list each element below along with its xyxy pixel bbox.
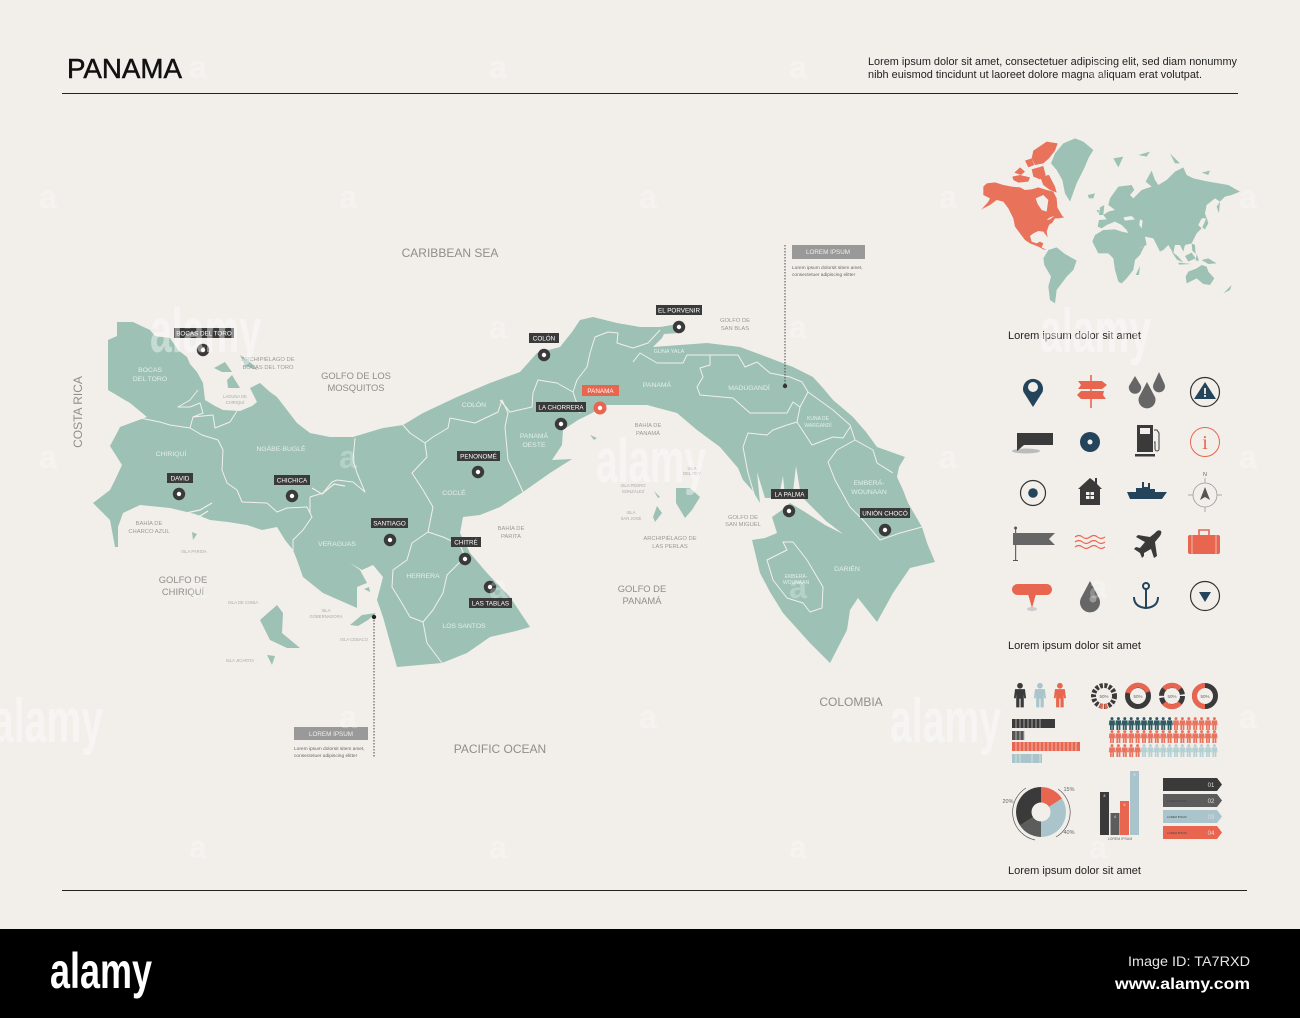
watermarks: a	[639, 179, 657, 215]
province labels: PANAMÁ	[643, 380, 672, 389]
watermarks: a	[339, 699, 357, 735]
water and neighbour labels: BAHÍA DE	[136, 520, 162, 527]
watermarks: a	[1089, 569, 1107, 605]
watermarks: a	[339, 179, 357, 215]
icon: down arrow	[1190, 582, 1220, 610]
callout: east: LOREM IPSUM	[806, 249, 850, 256]
province labels: CHIRIQUÍ	[156, 449, 186, 458]
intro text: Lorem ipsum dolor sit amet, consectetuer adipiscing elit, sed diam nonummy	[868, 56, 1238, 68]
water and neighbour labels: CARIBBEAN SEA	[402, 246, 498, 260]
water and neighbour labels: GOBERNADORA	[309, 614, 343, 619]
watermarks: a	[489, 829, 507, 865]
icon: compass: N	[1203, 472, 1207, 478]
mainland silhouette	[93, 317, 935, 667]
bar chart: 4	[1114, 815, 1116, 819]
arrow list: 03	[1208, 815, 1215, 821]
icon: house	[1078, 478, 1102, 505]
province labels: DARIÉN	[834, 564, 860, 573]
arrow list: LOREM IPSUM	[1167, 799, 1187, 803]
callout: west: consectetuer adipiscing elitter	[294, 753, 358, 759]
watermarks: a	[1239, 179, 1257, 215]
water and neighbour labels: ISLA DE COIBA	[228, 600, 258, 605]
province labels	[133, 349, 887, 630]
province labels: DEL TORO	[133, 376, 167, 383]
province labels: COCLÉ	[442, 488, 466, 497]
watermarks: a	[39, 439, 57, 475]
water and neighbour labels: ISLA	[321, 608, 331, 613]
donut charts: 50%	[1099, 694, 1109, 699]
water and neighbour labels: MOSQUITOS	[327, 382, 385, 393]
icon: drops	[1129, 372, 1165, 408]
watermarks: a	[39, 179, 57, 215]
province labels: EMBERÁ-	[854, 478, 884, 487]
water and neighbour labels: BAHÍA DE	[635, 422, 661, 429]
water and neighbour labels: SAN JOSÉ	[621, 516, 642, 521]
water and neighbour labels: SAN BLAS	[721, 326, 749, 332]
watermarks: a	[189, 829, 207, 865]
icon: anchor	[1134, 583, 1158, 608]
water and neighbour labels: LAS PERLAS	[652, 544, 688, 550]
watermarks: a	[789, 309, 807, 345]
icon: location pin	[1023, 379, 1043, 407]
footer bar: alamy	[50, 943, 152, 999]
icon: compass	[1188, 472, 1222, 512]
province borders	[140, 330, 922, 663]
city labels: PENONOMÉ	[460, 452, 497, 460]
province labels: VERAGUAS	[318, 541, 356, 548]
callout: east: consectetuer adipiscing elitter	[792, 272, 856, 278]
water and neighbour labels: GOLFO DE	[159, 574, 207, 585]
water and neighbour labels: ARCHIPIÉLAGO DE	[643, 535, 697, 542]
watermarks: a	[1239, 439, 1257, 475]
icon: oil drop	[1080, 581, 1100, 612]
callout: west	[294, 615, 376, 759]
icon: signpost	[1077, 375, 1107, 408]
water and neighbour labels: COLOMBIA	[819, 695, 883, 709]
province labels: COLÓN	[462, 400, 486, 409]
water and neighbour labels: GOLFO DE	[720, 318, 750, 324]
icon: map marker	[1012, 584, 1052, 611]
footer bar: www.alamy.com	[1114, 976, 1250, 993]
city labels: LA CHORRERA	[538, 404, 584, 412]
icon: info	[1190, 428, 1220, 456]
water and neighbour labels: CHIRIQUÍ	[226, 400, 245, 405]
water and neighbour labels: LAGUNA DE	[223, 394, 247, 399]
city labels	[167, 305, 910, 608]
islands	[192, 355, 700, 665]
watermarks: a	[639, 699, 657, 735]
arrow list: 01	[1208, 783, 1215, 789]
province labels: HERRERA	[406, 573, 440, 580]
icon: target	[1020, 480, 1046, 506]
footer bar	[0, 929, 1300, 1018]
icon: suitcase	[1188, 530, 1220, 554]
watermarks: alamy	[1040, 297, 1151, 366]
bar chart	[1100, 771, 1139, 841]
arrow list: LOREM IPSUM	[1167, 815, 1187, 819]
callout: west: LOREM IPSUM	[309, 731, 353, 738]
icon: ship	[1127, 482, 1167, 499]
province labels: OESTE	[522, 442, 546, 449]
arrow list: 04	[1208, 831, 1215, 837]
province labels: PANAMÁ	[520, 431, 549, 440]
watermarks: a	[789, 829, 807, 865]
city labels: DAVID	[171, 476, 190, 482]
water and neighbour labels: ISLA PEDRO	[621, 483, 646, 488]
city markers	[173, 321, 891, 593]
water and neighbour labels: ISLA PARIDA	[181, 549, 207, 554]
city labels: CHITRÉ	[454, 538, 478, 546]
icon: info: i	[1202, 432, 1208, 454]
city labels: BOCAS DEL TORO	[176, 330, 232, 338]
watermarks: a	[939, 439, 957, 475]
water and neighbour labels: PACIFIC OCEAN	[454, 742, 546, 756]
city labels: LA PALMA	[775, 492, 805, 498]
watermarks: alamy	[890, 687, 1001, 756]
province labels: WARGANDÍ	[804, 422, 832, 429]
watermarks: a	[489, 569, 507, 605]
bar chart: 8	[1104, 794, 1106, 798]
water and neighbour labels: GOLFO DE	[728, 515, 758, 521]
mangrove inlets	[170, 484, 345, 516]
watermarks: a	[189, 49, 207, 85]
water and neighbour labels: ARCHIPIÉLAGO DE	[241, 356, 295, 363]
water and neighbour labels: GOLFO DE LOS	[321, 370, 391, 381]
bar chart: LOREM IPSUM	[1108, 837, 1132, 841]
water and neighbour labels: PARITA	[501, 534, 521, 540]
donut charts: 50%	[1200, 694, 1210, 699]
water and neighbour labels: GOLFO DE	[618, 583, 666, 594]
callout: west: Lorem ipsum dolorsit sitem amet,	[294, 746, 365, 752]
water and neighbour labels: PANAMÁ	[623, 595, 662, 606]
water and neighbour labels: BOCAS DEL TORO	[242, 365, 294, 371]
bar chart: 6	[1124, 803, 1126, 807]
donut charts	[1094, 685, 1216, 707]
icon: waves	[1075, 536, 1105, 548]
water and neighbour labels: ISLA	[687, 466, 697, 471]
water and neighbour labels: ISLA	[626, 510, 636, 515]
caption: world map: Lorem ipsum dolor sit amet	[1008, 330, 1141, 342]
city labels: LAS TABLAS	[472, 600, 509, 608]
intro text	[868, 56, 1238, 81]
icon: warning	[1190, 378, 1220, 406]
water and neighbour labels	[71, 246, 883, 756]
watermarks: alamy	[150, 297, 261, 366]
watermarks: a	[339, 439, 357, 475]
watermarks: a	[489, 49, 507, 85]
world map	[981, 138, 1240, 303]
donut charts: 50%	[1167, 694, 1177, 699]
watermarks: a	[1089, 49, 1107, 85]
water and neighbour labels: CHIRIQUÍ	[162, 586, 204, 597]
watermarks: alamy	[596, 427, 706, 496]
arrow list: LOREM IPSUM	[1167, 831, 1187, 835]
province labels: WOUNAAN	[851, 489, 887, 496]
province labels: KUNA DE	[807, 416, 830, 422]
water and neighbour labels: BAHÍA DE	[498, 525, 524, 532]
watermarks: a	[1089, 829, 1107, 865]
water and neighbour labels: GONZÁLEZ	[622, 489, 645, 494]
city labels: SANTIAGO	[373, 520, 406, 528]
footer bar: Image ID: TA7RXD	[1128, 953, 1250, 969]
intro text: nibh euismod tincidunt ut laoreet dolore magna aliquam erat volutpat.	[868, 69, 1202, 81]
city labels: PANAMA	[587, 388, 614, 395]
arrow list: 02	[1208, 799, 1215, 805]
watermarks: a	[789, 49, 807, 85]
city labels: COLÓN	[533, 334, 556, 342]
icon: disc	[1080, 432, 1100, 452]
city labels: EL PORVENIR	[658, 308, 700, 314]
pie chart	[1002, 787, 1075, 840]
icon: fuel pump	[1135, 425, 1159, 456]
caption: icons: Lorem ipsum dolor sit amet	[1008, 640, 1141, 652]
province labels: EMBERÁ-	[785, 573, 808, 580]
bar chart: 9	[1134, 773, 1136, 777]
water and neighbour labels: SAN MIGUEL	[725, 522, 762, 528]
icon: flag	[1013, 526, 1055, 561]
people icons	[1014, 683, 1066, 707]
map of Panama	[71, 246, 935, 756]
icon: speech bubble	[1012, 433, 1053, 454]
pie chart: 15%	[1063, 787, 1075, 793]
province labels: LOS SANTOS	[442, 623, 486, 630]
province labels: MADUGANDÍ	[728, 383, 770, 392]
watermarks: a	[1239, 699, 1257, 735]
province labels: NGÄBE-BUGLÉ	[256, 444, 306, 453]
watermarks: a	[489, 309, 507, 345]
donut charts: 50%	[1133, 694, 1143, 699]
caption: charts: Lorem ipsum dolor sit amet	[1008, 865, 1141, 877]
watermarks: a	[189, 569, 207, 605]
province labels: GUNA YALA	[654, 349, 685, 355]
icon: plane	[1134, 530, 1161, 558]
watermarks	[0, 49, 1257, 865]
water and neighbour labels: COSTA RICA	[71, 376, 85, 448]
pie chart: 40%	[1063, 830, 1075, 836]
title: PANAMA	[67, 53, 183, 84]
water and neighbour labels: PANAMÁ	[636, 430, 660, 437]
watermarks: a	[789, 569, 807, 605]
water and neighbour labels: ISLA JICARITA	[226, 658, 254, 663]
people grid	[1109, 717, 1218, 757]
province labels: BOCAS	[138, 367, 162, 374]
water and neighbour labels: DEL REY	[683, 471, 701, 476]
watermarks: a	[939, 179, 957, 215]
callout: east	[783, 245, 865, 388]
water and neighbour labels: ISLA CEBACO	[340, 637, 369, 642]
city labels: CHICHICA	[277, 478, 308, 484]
province labels: WOUNAAN	[783, 580, 809, 586]
arrow list	[1163, 778, 1222, 839]
city labels: UNIÓN CHOCÓ	[862, 508, 908, 518]
callout: east: Lorem ipsum dolorsit sitem amet,	[792, 265, 863, 271]
pie chart: 20%	[1002, 799, 1014, 805]
segment bars	[1012, 719, 1080, 763]
water and neighbour labels: CHARCO AZUL	[128, 529, 170, 535]
